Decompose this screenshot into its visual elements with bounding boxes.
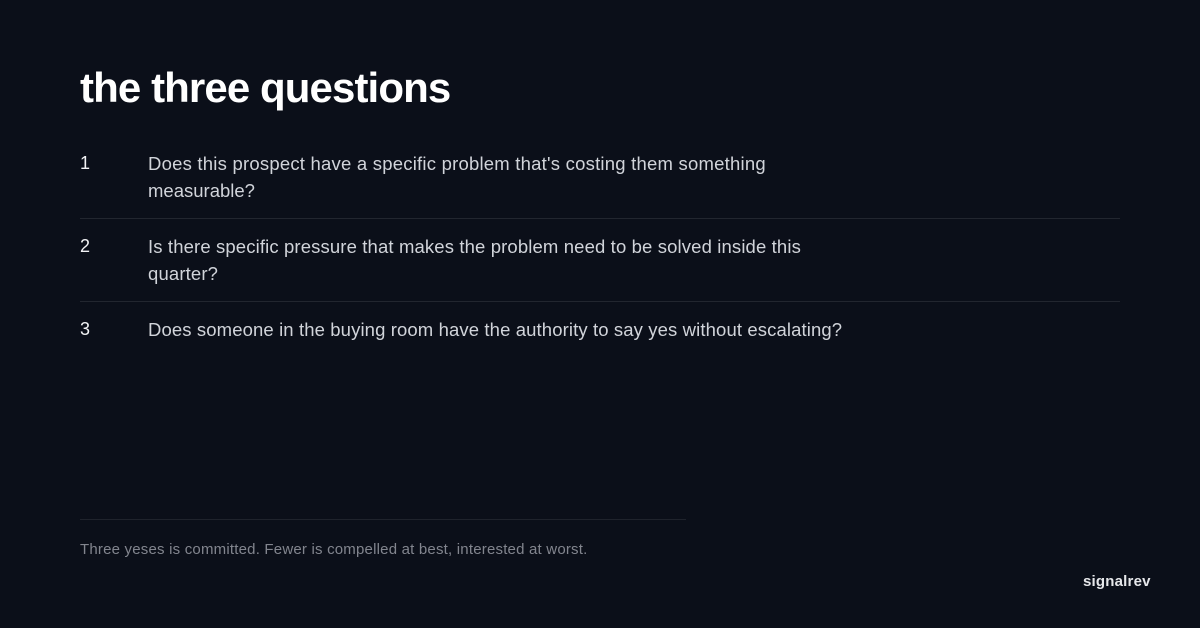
question 1 text (148, 153, 766, 201)
question list (80, 153, 1120, 340)
question 3 number: 3 (80, 319, 90, 339)
footnote: Three yeses is committed. Fewer is compelled at best, interested at worst. (80, 541, 588, 558)
question 1 number: 1 (80, 153, 90, 173)
title: the three questions (80, 64, 450, 111)
brand wordmark: signalrev (1083, 573, 1151, 590)
question 2 text (148, 236, 801, 284)
question 2 text: Is there specific pressure that makes the problem need to be solved inside this (148, 236, 801, 257)
question 3 text: Does someone in the buying room have the authority to say yes without escalating? (148, 319, 842, 340)
question 1 text: Does this prospect have a specific problem that's costing them something (148, 153, 766, 174)
question 2 number: 2 (80, 236, 90, 256)
question 1 text: measurable? (148, 180, 255, 201)
question 2 text: quarter? (148, 263, 218, 284)
